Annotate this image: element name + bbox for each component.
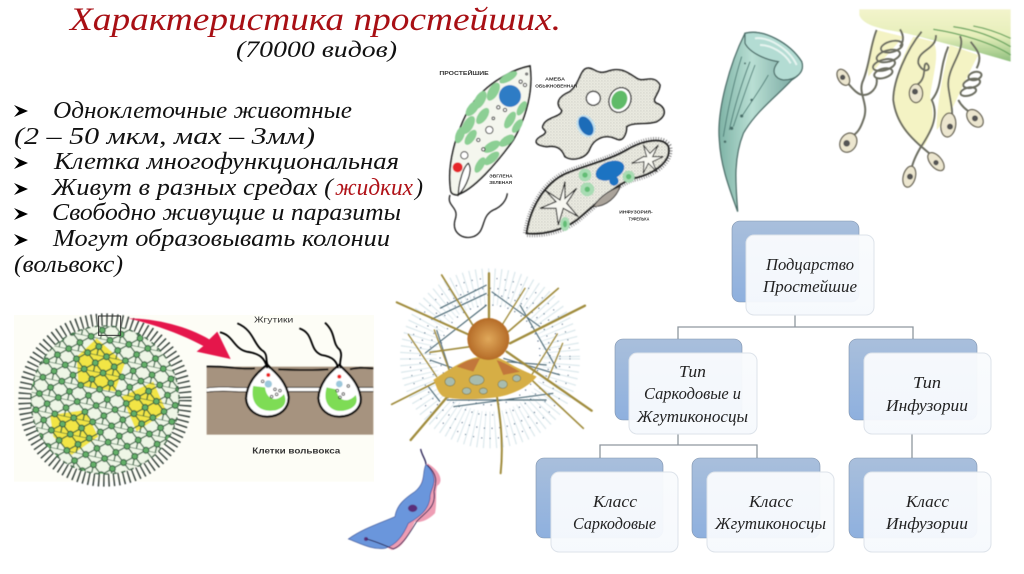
label: green: ЗЕЛЕНАЯ xyxy=(489,180,512,185)
node: class infusoria: Инфузории xyxy=(885,514,968,533)
paramecium xyxy=(527,141,669,234)
node: class infusoria: Класс xyxy=(905,492,949,511)
node: type infusoria: Тип xyxy=(913,373,941,392)
illustration: colony with spiral stalks xyxy=(834,9,1011,189)
bullet: environments xyxy=(14,175,423,201)
node: class sarcodina xyxy=(536,458,678,552)
arrow xyxy=(128,318,231,359)
illustration: trypanosome xyxy=(348,449,441,550)
title: Характеристика простейших. xyxy=(68,2,561,38)
lattice lines xyxy=(425,285,560,407)
bullet: unicellular: Одноклеточные животные xyxy=(53,98,352,124)
node: subkingdom protozoa: Подцарство xyxy=(765,255,854,274)
body xyxy=(433,355,537,399)
bullet: environments: Живут в разных средах ( xyxy=(51,175,335,201)
label: slipper: ТУФЕЛЬКА xyxy=(629,217,650,222)
selection frame xyxy=(99,316,121,335)
node: type infusoria: Инфузории xyxy=(885,396,968,415)
amoeba xyxy=(536,68,664,159)
bullet: multifunctional cell: Клетка многофункциональная xyxy=(53,149,399,175)
node: class infusoria xyxy=(849,458,991,552)
node: subkingdom protozoa xyxy=(732,221,874,315)
node: class flagellates: Класс xyxy=(748,492,793,511)
node: type infusoria xyxy=(849,339,991,434)
label: euglena green: ЭВГЛЕНА xyxy=(489,173,514,178)
bullet: environments: жидких xyxy=(335,175,413,201)
label: flagella: Жгутики xyxy=(254,315,293,324)
label: infusoria: ИНФУЗОРИЯ- xyxy=(619,209,653,214)
illustration: radiolarian xyxy=(392,273,592,473)
node: type sarcodina and flagellates: Саркодовые и xyxy=(644,384,741,403)
node: subkingdom protozoa: Простейшие xyxy=(762,277,857,296)
node: class sarcodina: Саркодовые xyxy=(573,514,656,533)
node: type sarcodina and flagellates xyxy=(615,339,757,434)
bullet: colonies: Могут образовывать колонии xyxy=(52,226,390,252)
illustration: stentor xyxy=(719,32,802,212)
radiating dotted rays xyxy=(410,278,570,438)
size range: (2 – 50 мкм, мах – 3мм) xyxy=(14,124,315,150)
illustration: volvox colony xyxy=(14,315,374,482)
subtitle: species count: (70000 видов) xyxy=(236,37,397,62)
bullet: free living and parasites: Свободно живущие и паразиты xyxy=(52,200,401,226)
label: common: ОБЫКНОВЕННАЯ xyxy=(535,83,577,88)
label: volvox cells: Клетки вольвокса xyxy=(252,445,341,455)
image background xyxy=(14,315,374,482)
cell tissue band xyxy=(207,323,373,435)
label: protozoa: ПРОСТЕЙШИЕ xyxy=(439,69,489,77)
bullet: environments: ) xyxy=(413,175,423,201)
node: class sarcodina: Класс xyxy=(592,492,637,511)
node: class flagellates: Жгутиконосцы xyxy=(714,514,826,533)
illustration: protozoa group xyxy=(439,66,669,237)
euglena xyxy=(449,66,531,237)
diagram: protozoa classification xyxy=(536,221,991,552)
flagella strands xyxy=(220,323,341,368)
spines xyxy=(392,273,592,473)
connectors xyxy=(600,315,913,458)
node: type sarcodina and flagellates: Тип xyxy=(679,362,706,381)
volvox sphere xyxy=(26,321,184,479)
node: type sarcodina and flagellates: Жгутиконосцы xyxy=(636,407,748,426)
volvox note: (вольвокс) xyxy=(14,252,123,278)
node: class flagellates xyxy=(692,458,834,552)
central sphere xyxy=(467,318,509,360)
text block: characteristics list xyxy=(14,98,423,278)
label: amoeba: АМЕБА xyxy=(545,77,566,82)
